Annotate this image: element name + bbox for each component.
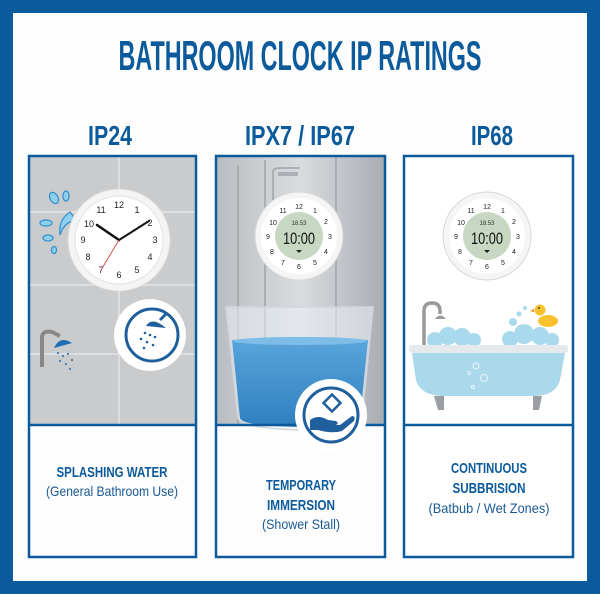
clock: digital: 6 [297,264,301,271]
text: continuous submersion [428,460,550,516]
bathtub [409,303,568,410]
panel: IP24 [29,156,196,557]
text: temporary immersion: (Shower Stall) [262,516,340,532]
clock: analog: 10 [84,219,94,229]
clock: analog: 11 [96,205,106,215]
clock: analog: 9 [80,235,86,245]
heading: IP68: IP68 [471,120,513,151]
text: continuous submersion: SUBBRISION [452,480,526,497]
clock: digital: 12 [483,204,491,211]
text: temporary immersion [262,477,340,532]
text: continuous submersion: (Batbub / Wet Zones) [428,500,550,516]
panel: IPX7 / IP67 [216,156,385,557]
clock: digital: 6 [485,264,489,271]
clock: digital: 5 [313,260,317,267]
clock: analog: 12 [114,200,124,210]
heading: IPX7 / IP67: IPX7 / IP67 [245,120,355,151]
clock: digital: 3 [328,234,332,241]
clock: digital: 18.53 [291,221,307,227]
clock: digital: 3 [516,234,520,241]
clock: digital: 9 [266,234,270,241]
text: temporary immersion: IMMERSION [267,497,335,514]
clock: analog: 7 [98,265,104,275]
clock: analog: 1 [134,205,140,215]
text: splashing water [46,464,178,499]
clock: digital: 8 [458,249,462,256]
clock: analog [68,189,170,291]
icon: hand holding device [295,379,367,451]
clock: digital: 7 [281,260,285,267]
text: splashing water: (General Bathroom Use) [46,483,178,499]
clock: analog: 8 [85,252,91,262]
clock: digital: 4 [512,249,516,256]
text: continuous submersion: CONTINUOUS [451,460,527,477]
clock: digital [443,192,531,280]
clock: analog: 2 [147,218,153,228]
panel: IP68 [404,156,573,557]
icon: rubber duck [530,304,558,327]
text: splashing water: SPLASHING WATER [56,464,168,481]
text: temporary immersion: TEMPORARY [266,477,336,494]
clock: digital: 10:00 [283,229,315,248]
clock: digital: 4 [324,249,328,256]
clock: analog: 6 [116,270,122,280]
icon: circle shower badge [114,299,186,371]
clock: digital: 10:00 [471,229,503,248]
clock: digital: 7 [469,260,473,267]
clock: digital: 8 [270,249,274,256]
clock: digital: 10 [269,220,277,227]
icon: splash [40,191,76,254]
clock: analog: 5 [134,265,140,275]
clock: digital [255,192,343,280]
clock: digital: 5 [501,260,505,267]
clock: digital: 10 [457,220,465,227]
icon: shower head [42,332,73,370]
clock: digital: 18.53 [479,221,495,227]
clock: analog: 3 [152,235,158,245]
glass of water [226,307,373,430]
clock: digital: 12 [295,204,303,211]
heading: IP24: IP24 [88,120,132,151]
clock: digital: 9 [454,234,458,241]
clock: digital: 11 [467,208,475,215]
clock: digital: 1 [313,208,317,215]
clock: analog: 4 [147,252,153,262]
clock: digital: 2 [512,219,516,226]
clock: digital: 1 [501,208,505,215]
clock: digital: 2 [324,219,328,226]
clock: digital: 11 [279,208,287,215]
